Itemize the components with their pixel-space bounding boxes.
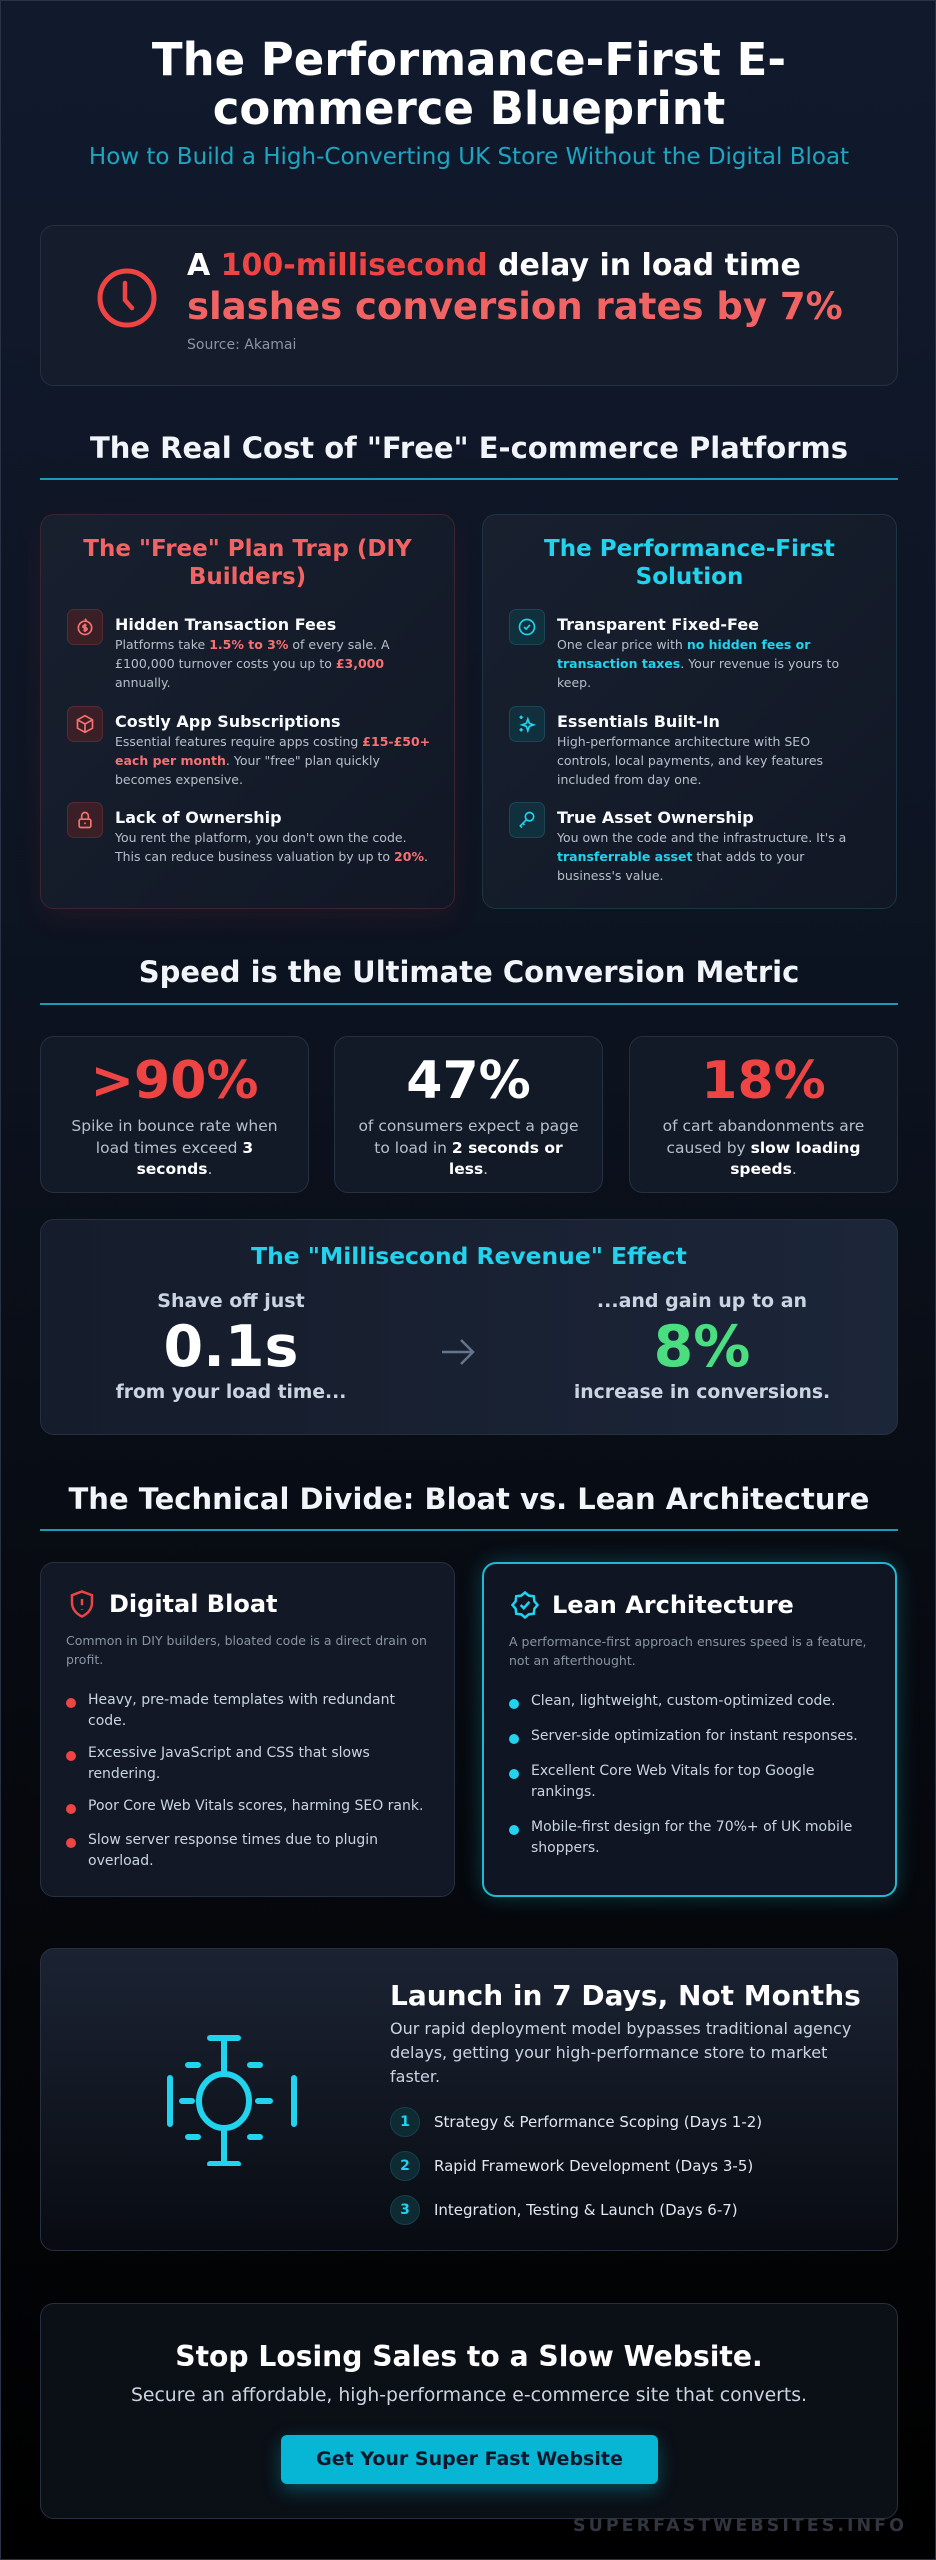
bullet list: Server-side optimization for instant responses. xyxy=(531,1728,858,1744)
icon: rocket/launch target xyxy=(167,2035,297,2166)
right stat: increase in conversions. xyxy=(574,1382,830,1403)
bullet list: Poor Core Web Vitals scores, harming SEO rank. xyxy=(88,1798,423,1814)
stat card: bounce: Spike in bounce rate when load times exceed 3 seconds. xyxy=(71,1117,278,1178)
item: hidden fees xyxy=(67,609,390,690)
item: essentials xyxy=(509,706,823,787)
bullet list: Excessive JavaScript and CSS that slows rendering. xyxy=(88,1745,370,1782)
item: app subscriptions: Essential features require apps costing £15-£50+ each per month. Your "free" plan quickly becomes expensive. xyxy=(115,734,430,787)
panel: free plan trap xyxy=(40,514,455,909)
item: app subscriptions: Costly App Subscriptions xyxy=(115,712,340,731)
panel heading: Digital Bloat xyxy=(109,1590,277,1618)
bullet list: Clean, lightweight, custom-optimized code. xyxy=(531,1693,836,1709)
item: asset ownership xyxy=(509,802,846,883)
item: hidden fees: Hidden Transaction Fees xyxy=(115,615,336,634)
step 3: Integration, Testing & Launch (Days 6-7) xyxy=(434,2201,738,2219)
left stat: 0.1s xyxy=(164,1314,298,1380)
stat card: cart abandonment: 18% xyxy=(701,1051,826,1111)
bullet list: Slow server response times due to plugin overload. xyxy=(88,1832,378,1869)
step 2: 2 xyxy=(400,2158,410,2174)
panel title: The Performance-First xyxy=(544,536,835,562)
panel: digital bloat xyxy=(40,1562,455,1897)
item: ownership: You rent the platform, you don't own the code. This can reduce business valuation by up to 20%. xyxy=(115,830,428,864)
left stat: Shave off just xyxy=(157,1290,305,1312)
panel title: The "Millisecond Revenue" Effect xyxy=(251,1242,687,1270)
right stat xyxy=(574,1290,830,1403)
step 3 xyxy=(390,2195,738,2225)
launch title: Launch in 7 Days, Not Months xyxy=(390,1979,861,2012)
stat card: expectation: of consumers expect a page to load in 2 seconds or less. xyxy=(358,1117,579,1178)
item: ownership: Lack of Ownership xyxy=(115,808,282,827)
panel: performance-first solution xyxy=(482,514,897,909)
item: app subscriptions xyxy=(67,706,430,787)
panel title xyxy=(83,536,412,590)
step 1: 1 xyxy=(400,2114,410,2130)
stat card: expectation xyxy=(334,1036,603,1193)
step 3: 3 xyxy=(400,2202,410,2218)
callout text: A 100-millisecond delay in load time xyxy=(187,248,801,283)
step 1: Strategy & Performance Scoping (Days 1-2) xyxy=(434,2113,762,2131)
item: fixed fee xyxy=(509,609,839,690)
panel: launch in 7 days xyxy=(40,1948,898,2251)
bullet list xyxy=(509,1693,858,1856)
bullet list: Heavy, pre-made templates with redundant code. xyxy=(88,1692,395,1729)
item: essentials: Essentials Built-In xyxy=(557,712,720,731)
description: Common in DIY builders, bloated code is a direct drain on profit. xyxy=(66,1633,427,1667)
subtitle: How to Build a High-Converting UK Store Without the Digital Bloat xyxy=(89,144,849,170)
bullet list xyxy=(66,1692,423,1869)
bullet list: Mobile-first design for the 70%+ of UK mobile shoppers. xyxy=(531,1819,852,1856)
title: commerce Blueprint xyxy=(213,82,725,135)
title xyxy=(152,33,786,135)
icon: clock xyxy=(98,268,156,328)
panel title xyxy=(544,536,835,590)
heading: technical divide: The Technical Divide: Bloat vs. Lean Architecture xyxy=(69,1482,869,1516)
panel title: The "Free" Plan Trap (DIY xyxy=(83,536,412,562)
CTA button: Get Your Super Fast Website xyxy=(316,2448,623,2470)
panel: call to action xyxy=(40,2303,898,2519)
CTA button xyxy=(281,2435,658,2484)
stat card: bounce: >90% xyxy=(90,1051,259,1111)
left stat xyxy=(116,1290,346,1403)
launch description: Our rapid deployment model bypasses traditional agency delays, getting your high-performance store to market faster. xyxy=(390,2019,851,2086)
callout text xyxy=(187,248,843,353)
panel heading: Lean Architecture xyxy=(552,1591,794,1619)
panel title: Solution xyxy=(636,564,743,590)
panel: lean architecture xyxy=(482,1562,897,1897)
panel title: Builders) xyxy=(189,564,306,590)
arrow xyxy=(442,1339,475,1365)
step 2: Rapid Framework Development (Days 3-5) xyxy=(434,2157,753,2175)
right stat: ...and gain up to an xyxy=(597,1290,807,1312)
right stat: 8% xyxy=(654,1314,750,1380)
steps xyxy=(390,2107,762,2225)
stat callout: 100ms delay xyxy=(40,225,898,386)
CTA subtext: Secure an affordable, high-performance e-commerce site that converts. xyxy=(131,2385,807,2406)
item: hidden fees: Platforms take 1.5% to 3% of every sale. A £100,000 turnover costs you up to £3,000 annually. xyxy=(115,637,390,690)
left stat: from your load time... xyxy=(116,1382,346,1403)
heading: real cost: The Real Cost of "Free" E-commerce Platforms xyxy=(90,431,848,465)
bullet list: Excellent Core Web Vitals for top Google rankings. xyxy=(531,1763,815,1800)
stat card: bounce xyxy=(40,1036,309,1193)
item: fixed fee: One clear price with no hidden fees or transaction taxes. Your revenue is yours to keep. xyxy=(557,637,839,690)
callout text: slashes conversion rates by 7% xyxy=(187,285,843,328)
item: fixed fee: Transparent Fixed-Fee xyxy=(557,615,759,634)
title: The Performance-First E- xyxy=(152,33,786,86)
CTA heading: Stop Losing Sales to a Slow Website. xyxy=(175,2340,763,2373)
item: asset ownership: You own the code and the infrastructure. It's a transferrable asset that adds to your business's value. xyxy=(557,830,846,883)
footer brand: SUPERFASTWEBSITES.INFO xyxy=(573,2516,907,2536)
callout text: Source: Akamai xyxy=(187,337,296,353)
item: ownership xyxy=(67,802,428,864)
panel: millisecond revenue effect xyxy=(40,1219,898,1435)
step 1 xyxy=(390,2107,762,2137)
stat card: expectation: 47% xyxy=(406,1051,531,1111)
stat card: cart abandonment xyxy=(629,1036,898,1193)
step 2 xyxy=(390,2151,753,2181)
heading: speed: Speed is the Ultimate Conversion Metric xyxy=(139,955,799,989)
description: A performance-first approach ensures speed is a feature, not an afterthought. xyxy=(509,1634,866,1668)
item: asset ownership: True Asset Ownership xyxy=(557,808,754,827)
item: essentials: High-performance architecture with SEO controls, local payments, and key features included from day one. xyxy=(557,734,823,787)
stat card: cart abandonment: of cart abandonments are caused by slow loading speeds. xyxy=(663,1117,864,1178)
